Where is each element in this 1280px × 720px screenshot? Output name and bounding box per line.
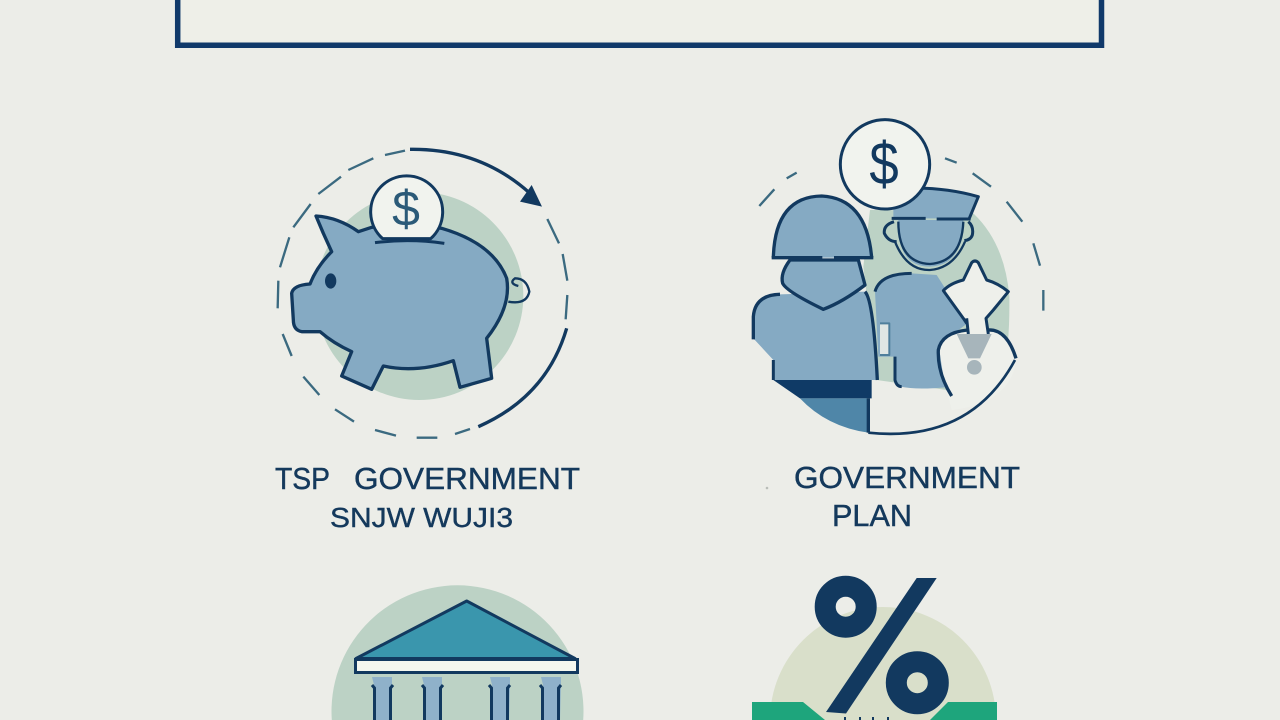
ticks <box>845 717 888 720</box>
left person <box>753 196 878 433</box>
green backing circle <box>332 585 584 720</box>
pig body <box>292 216 507 389</box>
icon: bank building <box>332 585 584 720</box>
label: government plan: PLAN <box>832 498 912 533</box>
coin: $ <box>392 181 420 237</box>
label: TSP government: TSP <box>275 461 330 496</box>
beige backing circle <box>770 607 996 720</box>
belt band <box>773 380 872 398</box>
green backing circle <box>315 192 523 400</box>
icon: piggy bank <box>278 149 567 438</box>
label: TSP government <box>275 461 580 533</box>
label: TSP government: GOVERNMENT <box>354 461 580 496</box>
coin <box>371 176 443 239</box>
green band <box>752 702 997 720</box>
percent sign <box>825 578 938 714</box>
speck <box>766 487 768 489</box>
columns <box>372 677 561 720</box>
bottom arc <box>868 360 1015 434</box>
green backing shape <box>863 210 1009 390</box>
dashed orbit <box>759 158 1043 311</box>
label: TSP government: SNJW WUJI3 <box>330 502 513 533</box>
icon: service members <box>753 120 1043 434</box>
orbit arrow <box>410 149 567 427</box>
right person <box>875 188 978 389</box>
coin slot <box>375 241 444 243</box>
label: government plan <box>794 460 1020 533</box>
pig eye <box>325 273 336 289</box>
label: government plan: GOVERNMENT <box>794 460 1020 495</box>
beam <box>356 660 578 672</box>
icon: percent with banknote <box>752 578 997 720</box>
uniform clip <box>880 323 889 355</box>
lower panel <box>800 398 868 433</box>
pig tail <box>508 278 529 302</box>
coin <box>840 120 930 209</box>
dashed orbit <box>278 151 567 438</box>
coin: $ <box>869 130 899 197</box>
pediment <box>356 601 575 658</box>
woman with star collar <box>938 260 1017 410</box>
top title frame <box>178 0 1101 45</box>
